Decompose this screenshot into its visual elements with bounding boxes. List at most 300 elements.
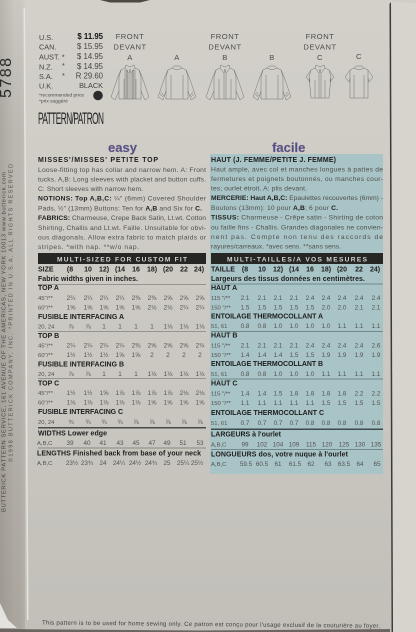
yardage table: metric: HAUT A bbox=[211, 285, 237, 292]
yardage table: imperial: 2 bbox=[182, 352, 186, 359]
yardage table: imperial: ⅞ bbox=[149, 419, 155, 426]
table banner bbox=[38, 253, 206, 264]
garment view: front B: DEVANT bbox=[208, 42, 242, 52]
yardage table: imperial: 25 bbox=[163, 460, 171, 467]
yardage table: imperial: 1½ bbox=[84, 389, 93, 397]
yardage table: metric: 2.4 bbox=[355, 295, 364, 302]
yardage table: imperial: ⅞ bbox=[181, 419, 187, 426]
yardage table: imperial: ¾ bbox=[68, 419, 74, 426]
garment view: front A: DEVANT bbox=[113, 42, 147, 52]
yardage table: metric: 1.9 bbox=[355, 352, 364, 359]
yardage table: metric: 2.4 bbox=[306, 342, 315, 350]
yardage table: metric: 115 "/** bbox=[211, 344, 231, 350]
yardage table: imperial: 2⅜ bbox=[132, 295, 141, 302]
french description: Boutons (13mm): 10 pour A,B; 6 pour C. bbox=[211, 205, 338, 212]
yardage table: metric: 1.0 bbox=[322, 323, 331, 330]
yardage table: metric: 65 bbox=[373, 461, 381, 468]
french panel bbox=[210, 140, 383, 474]
yardage table: metric: 1.5 bbox=[372, 400, 381, 407]
yardage table: metric: 16 bbox=[306, 266, 314, 274]
yardage table: imperial: 1⅝ bbox=[84, 305, 93, 312]
yardage table: imperial: 2 bbox=[198, 352, 202, 359]
yardage table: metric: 0.8 bbox=[258, 323, 267, 330]
yardage table: metric: 1.0 bbox=[274, 371, 283, 378]
french description: MERCERIE: Haut A,B,C: Epaulettes recouvertes (6mm) - bbox=[211, 195, 383, 202]
table banner: MULTI-TAILLES/A VOS MESURES bbox=[227, 256, 368, 264]
yardage table: imperial: Fabric widths given in inches. bbox=[38, 276, 138, 283]
yardage table: imperial: 1⅛ bbox=[67, 400, 76, 406]
yardage table: imperial: 1⅝ bbox=[132, 305, 141, 312]
yardage table: imperial: 45 bbox=[132, 440, 140, 447]
yardage table: metric: 1.1 bbox=[322, 371, 331, 378]
yardage table: imperial: 60"/** bbox=[38, 306, 54, 312]
english description: tucks. A,B: Long sleeves with placket and button cuffs. bbox=[38, 176, 206, 184]
yardage table: imperial: TOP C bbox=[38, 380, 59, 388]
english description: ous diagonals. Allow extra fabric to match plaids or bbox=[38, 234, 207, 242]
yardage table: metric: 150 "/** bbox=[211, 306, 231, 312]
garment view: front A bbox=[111, 32, 149, 100]
yardage table: imperial: 20, 24 bbox=[38, 420, 55, 426]
price list: R 29.60 bbox=[76, 72, 104, 80]
yardage table: imperial: 1⅝ bbox=[116, 305, 125, 312]
yardage table: metric: (8 bbox=[242, 266, 248, 274]
price list: AUST. * bbox=[39, 52, 65, 62]
price list: BLACK bbox=[79, 81, 103, 90]
yardage table: imperial: 2⅝ bbox=[164, 295, 173, 302]
yardage table: metric: 150 "/** bbox=[211, 353, 231, 359]
yardage table: metric: 2.4 bbox=[306, 295, 315, 302]
yardage table: metric: 2.1 bbox=[241, 295, 250, 302]
yardage table: imperial: ¾ bbox=[101, 419, 107, 426]
yardage table: metric: 1.9 bbox=[372, 352, 381, 359]
garment view: front B: FRONT bbox=[211, 32, 239, 41]
yardage table: metric: 1.4 bbox=[241, 390, 250, 398]
yardage table: metric: 1.1 bbox=[372, 323, 381, 330]
yardage table: metric: 2.1 bbox=[290, 342, 299, 350]
yardage table: imperial: 24¾ bbox=[145, 460, 158, 467]
yardage table: imperial: 1⅛ bbox=[180, 371, 189, 378]
yardage table: imperial: 1⅛ bbox=[100, 400, 109, 406]
yardage table: imperial: 1⅛ bbox=[116, 400, 125, 406]
yardage table: metric: 0.8 bbox=[241, 323, 250, 330]
yardage table: metric: 2.1 bbox=[258, 295, 267, 302]
yardage table: imperial: 2⅛ bbox=[180, 390, 189, 397]
yardage table: imperial: WIDTHS Lower edge bbox=[38, 430, 107, 438]
french description: TISSUS: Charmeuse - Crêpe satin - Shirting de coton bbox=[211, 214, 383, 222]
garment view: back C: C bbox=[356, 52, 362, 61]
english description: stripes. *with nap. **w/o nap. bbox=[38, 244, 139, 251]
yardage table: metric: 1.0 bbox=[290, 323, 299, 330]
yardage table: imperial: 1 bbox=[118, 371, 122, 378]
yardage table: imperial: 23¾ bbox=[81, 460, 94, 467]
yardage table: metric: 1.5 bbox=[241, 304, 250, 312]
yardage table: metric: 0.8 bbox=[241, 371, 250, 378]
yardage table: imperial: 1½ bbox=[84, 351, 93, 359]
yardage table: imperial: ¾ bbox=[85, 419, 91, 426]
yardage table: metric: 2.1 bbox=[274, 295, 283, 302]
yardage table: imperial: 25½ bbox=[191, 459, 204, 467]
yardage table: imperial: 1⅛ bbox=[148, 371, 157, 378]
yardage table: imperial: FUSIBLE INTERFACING C bbox=[38, 409, 123, 416]
yardage table: imperial: 1⅞ bbox=[148, 390, 157, 397]
yardage table: metric: 1.8 bbox=[290, 390, 299, 398]
yardage table: metric: 0.7 bbox=[290, 420, 299, 427]
yardage table: imperial: 1⅝ bbox=[67, 305, 76, 312]
yardage table: imperial: 39 bbox=[66, 440, 74, 447]
english description bbox=[38, 157, 207, 251]
yardage table: metric: 115 "/** bbox=[211, 392, 231, 398]
yardage table: imperial: 1⅛ bbox=[84, 400, 93, 406]
yardage table: metric: HAUT C bbox=[211, 380, 237, 388]
yardage table: metric: 24) bbox=[370, 266, 380, 274]
yardage table: metric: 0.8 bbox=[355, 420, 364, 427]
yardage table: imperial: 40 bbox=[83, 440, 91, 447]
yardage table: imperial: 60"/** bbox=[38, 353, 54, 359]
price list: S.A. bbox=[39, 72, 53, 81]
yardage table: imperial: ⅞ bbox=[197, 419, 203, 426]
yardage table: metric: 1.1 bbox=[338, 323, 347, 330]
yardage table: imperial: 22 bbox=[180, 266, 188, 274]
garment view: front C: C bbox=[317, 53, 323, 62]
yardage table: metric: 18) bbox=[321, 266, 331, 274]
english description: Pads, ½" (13mm) Buttons: Ten for A,B and Six for C. bbox=[38, 204, 202, 212]
french description: nent pas. Compte non tenu des raccords de bbox=[211, 234, 383, 241]
yardage table: imperial: ⅞ bbox=[68, 324, 74, 330]
french description: tes; ourlet étroit. A: plis devant. bbox=[211, 186, 307, 192]
yardage table: metric: 2.6 bbox=[372, 342, 381, 350]
yardage table: metric: 102 bbox=[257, 442, 268, 448]
yardage table: metric: 1.5 bbox=[355, 400, 364, 407]
yardage table: imperial: FUSIBLE INTERFACING B bbox=[38, 362, 124, 368]
yardage table: imperial: 16 bbox=[132, 266, 140, 274]
yardage table: imperial: 2⅝ bbox=[180, 295, 189, 302]
yardage table: imperial: 1 bbox=[134, 371, 138, 378]
yardage table: imperial: 1½ bbox=[67, 389, 76, 397]
yardage table: imperial: 1⅞ bbox=[116, 390, 125, 397]
price list: $ 15.95 bbox=[77, 42, 104, 51]
yardage table: metric: 2.4 bbox=[322, 342, 331, 350]
yardage table: metric: 150 "/** bbox=[211, 401, 231, 407]
yardage table: metric: 64 bbox=[356, 461, 364, 468]
yardage table: imperial: 2¼ bbox=[116, 295, 125, 302]
yardage table: metric: 1.5 bbox=[274, 304, 283, 312]
price list: CAN. bbox=[39, 42, 56, 52]
yardage table: imperial: 60"/** bbox=[38, 400, 54, 406]
yardage table: imperial: 43 bbox=[116, 440, 124, 447]
yardage table: imperial: 2⅝ bbox=[164, 342, 173, 350]
yardage table: imperial: A,B,C bbox=[37, 461, 53, 467]
yardage table: metric: A,B,C bbox=[211, 442, 227, 448]
yardage table: metric: 0.8 bbox=[306, 420, 315, 427]
yardage table: imperial: 23½ bbox=[66, 459, 79, 467]
yardage table: imperial: 2¼ bbox=[84, 342, 93, 350]
yardage table: metric: LONGUEURS dos, votre nuque à l'ourlet bbox=[211, 452, 349, 458]
yardage table: imperial: 24) bbox=[194, 266, 204, 274]
yardage table: metric: 0.7 bbox=[258, 420, 267, 427]
yardage table: imperial: TOP A bbox=[38, 285, 59, 292]
garment view: front B bbox=[206, 32, 244, 100]
yardage table: metric: 1.5 bbox=[258, 304, 267, 312]
yardage table: imperial: 1⅝ bbox=[164, 400, 173, 406]
garment view: back B: B bbox=[269, 53, 275, 62]
price list bbox=[39, 32, 104, 104]
yardage table: imperial: 24½ bbox=[129, 459, 142, 467]
yardage table: metric: 1.4 bbox=[258, 390, 267, 398]
garment view: back B bbox=[253, 53, 291, 100]
yardage table: imperial: 2¼ bbox=[100, 295, 109, 302]
price list: $ 14.95 bbox=[77, 52, 104, 61]
garment view: front B: B bbox=[222, 53, 228, 62]
yardage table: metric bbox=[211, 266, 383, 468]
yardage table: metric: 109 bbox=[289, 442, 300, 448]
yardage table: metric: 61 bbox=[274, 461, 282, 468]
yardage table: metric: 12) bbox=[273, 266, 283, 274]
yardage table: imperial: 1⅝ bbox=[132, 352, 141, 359]
price list: * bbox=[62, 61, 65, 70]
yardage table: metric: 125 bbox=[339, 442, 350, 448]
yardage table: imperial: 2⅛ bbox=[196, 390, 205, 397]
yardage table: imperial: 2 bbox=[166, 352, 170, 359]
sidebar: publisher address: BUTTERICK PATTERN SERVICE, 161 AVENUE OF THE AMERICAS, NEW YORK 10013 www.butterick.com bbox=[2, 172, 8, 512]
yardage table: imperial: 2¼ bbox=[196, 305, 205, 312]
yardage table: imperial: 45"/** bbox=[38, 344, 54, 350]
table banner: MULTI-SIZED FOR CUSTOM FIT bbox=[57, 256, 187, 264]
yardage table: metric: 1.5 bbox=[306, 352, 315, 359]
yardage table: imperial: 1⅛ bbox=[164, 324, 173, 330]
yardage table: metric: 1.4 bbox=[274, 352, 283, 359]
yardage table: imperial: 53 bbox=[196, 440, 204, 447]
yardage table: metric: 135 bbox=[371, 442, 382, 448]
french description: ou faille fins - Challis. Grandes diagonales ne convien- bbox=[211, 224, 383, 232]
yardage table: imperial: 2⅝ bbox=[196, 295, 205, 302]
yardage table: metric: ENTOILAGE THERMOCOLLANT C bbox=[211, 410, 324, 417]
yardage table: imperial: 1 bbox=[118, 324, 122, 330]
yardage table: metric: 1.1 bbox=[258, 400, 267, 407]
yardage table: imperial: 1½ bbox=[100, 351, 109, 359]
yardage table: imperial: 41 bbox=[99, 440, 107, 447]
yardage table: metric: 60.5 bbox=[256, 461, 269, 468]
panel background bbox=[210, 154, 383, 474]
garment view: front A: A bbox=[127, 53, 133, 62]
price list: $ 11.95 bbox=[77, 32, 104, 41]
yardage table: metric: 2.1 bbox=[355, 304, 364, 312]
yardage table: imperial: 24¼ bbox=[113, 460, 126, 467]
yardage table: imperial: 1⅛ bbox=[164, 371, 173, 378]
yardage table: imperial: 1⅝ bbox=[196, 400, 205, 406]
yardage table: imperial: 2⅜ bbox=[148, 295, 157, 302]
yardage table: metric: 1.0 bbox=[290, 371, 299, 378]
yardage table: imperial: 25¼ bbox=[177, 460, 190, 467]
english description: Loose-fitting top has collar and narrow hem. A: Front bbox=[38, 167, 206, 174]
yardage table: metric: 1.0 bbox=[306, 323, 315, 330]
difficulty label: easy: easy bbox=[108, 140, 138, 155]
yardage table: metric: 2.0 bbox=[338, 304, 347, 312]
yardage table: metric: 0.8 bbox=[322, 420, 331, 427]
yardage table: imperial: 10 bbox=[84, 266, 92, 274]
price list: * bbox=[62, 71, 65, 80]
yardage table: imperial: 2¼ bbox=[180, 305, 189, 312]
yardage table: imperial: 2¾ bbox=[196, 342, 205, 350]
yardage table: imperial: ⅞ bbox=[85, 324, 91, 330]
garment view: front C: DEVANT bbox=[303, 42, 337, 52]
english description: C: Short sleeves with narrow hem. bbox=[38, 186, 143, 193]
yardage table: metric: 61.5 bbox=[289, 461, 302, 468]
french description: Haut ample, avec col et manches longues à pattes de bbox=[211, 166, 383, 174]
yardage table: imperial: 2⅛ bbox=[164, 305, 173, 312]
yardage table: metric: ENTOILAGE THERMOCOLLANT A bbox=[211, 314, 323, 320]
yardage table: metric: 2.4 bbox=[338, 295, 347, 302]
yardage table: metric: 1.1 bbox=[338, 371, 347, 378]
yardage table: metric: 1.5 bbox=[274, 390, 283, 398]
english description: Shirting, Challis and Lt.wt. Faille. Unsuitable for obvi- bbox=[38, 225, 206, 232]
yardage table: metric: 2.1 bbox=[241, 342, 250, 350]
yardage table: imperial: 1⅛ bbox=[196, 371, 205, 378]
yardage table: imperial: 47 bbox=[148, 440, 156, 447]
pattern heading: PATTERN/PATRON bbox=[38, 109, 104, 128]
price list: *prix suggéré bbox=[39, 98, 68, 104]
yardage table: imperial: 2¼ bbox=[116, 342, 125, 350]
yardage table: metric: 1.1 bbox=[274, 400, 283, 407]
yardage table: metric: 1.1 bbox=[241, 400, 250, 407]
yardage table: metric: 1.0 bbox=[274, 323, 283, 330]
yardage table: imperial: 2⅝ bbox=[180, 342, 189, 350]
yardage table: imperial: TOP B bbox=[38, 333, 59, 340]
yardage table: imperial: 18) bbox=[147, 266, 157, 274]
yardage table: metric: 1.5 bbox=[338, 400, 347, 407]
yardage table: metric: Largeurs des tissus données en centimètres. bbox=[211, 276, 365, 283]
yardage table: metric: 130 bbox=[355, 442, 366, 448]
sidebar: copyright: ©1998 BUTTERICK COMPANY, INC. *PRINTED IN U.S.A. ALL RIGHTS RESERVED bbox=[8, 164, 14, 462]
yardage table: metric: 1.9 bbox=[322, 352, 331, 359]
yardage table: metric: 1.8 bbox=[322, 390, 331, 398]
yardage table: imperial: 2⅜ bbox=[132, 342, 141, 350]
french description bbox=[211, 157, 383, 250]
yardage table: metric: 0.7 bbox=[241, 420, 250, 427]
yardage table: metric: 2.1 bbox=[372, 304, 381, 312]
price list: N.Z. bbox=[39, 62, 53, 72]
yardage table: metric: 59.5 bbox=[240, 461, 253, 468]
yardage table: imperial: (14 bbox=[115, 266, 125, 274]
table banner bbox=[211, 253, 383, 264]
garment view: front C: FRONT bbox=[306, 32, 334, 41]
yardage table: metric: 1.9 bbox=[338, 352, 347, 359]
yardage table: metric: 2.1 bbox=[290, 295, 299, 302]
yardage table: imperial: ⅞ bbox=[68, 371, 74, 378]
yardage table: metric: 99 bbox=[241, 442, 249, 448]
garment view: front A: FRONT bbox=[116, 32, 144, 41]
yardage table: metric: 1.8 bbox=[306, 390, 315, 398]
yardage table: imperial: SIZE bbox=[38, 266, 54, 274]
yardage table: imperial: 49 bbox=[163, 440, 171, 447]
yardage table: metric: 51, 61 bbox=[211, 372, 227, 378]
yardage table: imperial: 1 bbox=[150, 324, 154, 330]
yardage table: metric: 1.5 bbox=[322, 400, 331, 407]
yardage table: metric: 63.5 bbox=[338, 461, 351, 468]
yardage table: metric: ENTOILAGE THERMOCOLLANT B bbox=[211, 361, 323, 368]
english panel bbox=[37, 140, 207, 467]
yardage table: metric: 2.4 bbox=[338, 342, 347, 350]
yardage table: metric: (14 bbox=[289, 266, 299, 274]
yardage table: metric: 1.1 bbox=[355, 371, 364, 378]
yardage table: metric: 2.0 bbox=[322, 304, 331, 312]
yardage table: imperial: ¾ bbox=[117, 419, 123, 426]
yardage table: metric: 1.4 bbox=[241, 352, 250, 359]
yardage table: imperial: 1⅞ bbox=[132, 390, 141, 397]
yardage table: imperial: 20, 24 bbox=[38, 372, 55, 378]
yardage table: imperial: 1⅝ bbox=[100, 390, 109, 397]
yardage table: imperial: 1 bbox=[102, 324, 106, 330]
yardage table: imperial: LENGTHS Finished back from base of your neck bbox=[37, 450, 201, 458]
yardage table: imperial: 45"/** bbox=[38, 296, 54, 302]
yardage table: metric: LARGEURS à l'ourlet bbox=[211, 432, 282, 438]
yardage table: imperial: 51 bbox=[179, 440, 187, 447]
yardage table: metric: 120 bbox=[322, 442, 333, 448]
yardage table: imperial: ⅞ bbox=[133, 419, 139, 426]
yardage table: metric: 1.1 bbox=[306, 400, 315, 407]
footer notice: This pattern is to be used for home sewing only. Ce patron est conçu pour l'usage exclusif de la couturière au foyer. bbox=[42, 621, 380, 630]
yardage table: metric: 115 bbox=[306, 442, 317, 448]
yardage table: metric: 2.2 bbox=[372, 390, 381, 398]
yardage table: imperial: 1⅝ bbox=[100, 305, 109, 312]
yardage table: imperial: 1½ bbox=[67, 351, 76, 359]
price list: $ 14.95 bbox=[77, 62, 104, 71]
yardage table: imperial: 2⅝ bbox=[148, 342, 157, 350]
yardage table: metric: 104 bbox=[273, 442, 284, 448]
yardage table: metric: 1.1 bbox=[372, 371, 381, 378]
yardage table: imperial: 1⅛ bbox=[180, 324, 189, 330]
yardage table: metric: 51, 61 bbox=[211, 421, 227, 427]
yardage table: imperial: 1⅞ bbox=[164, 390, 173, 397]
yardage table: imperial: 2⅛ bbox=[148, 305, 157, 312]
yardage table: imperial: 1⅛ bbox=[196, 324, 205, 330]
yardage table: metric: 0.8 bbox=[338, 420, 347, 427]
yardage table: metric: 1.8 bbox=[338, 390, 347, 398]
yardage table: imperial: 1⅝ bbox=[180, 400, 189, 406]
yardage table: metric: 62 bbox=[307, 461, 315, 468]
yardage table: metric: 2.1 bbox=[274, 342, 283, 350]
yardage table: metric: A,B,C bbox=[211, 462, 227, 468]
yardage table: metric: 22 bbox=[355, 266, 363, 274]
difficulty label: facile: facile bbox=[272, 140, 305, 155]
yardage table: imperial: 20, 24 bbox=[38, 324, 55, 330]
yardage table: metric: 1.5 bbox=[290, 352, 299, 359]
yardage table: metric: 2.4 bbox=[322, 295, 331, 302]
yardage table: metric: 1.1 bbox=[290, 400, 299, 407]
garment view: front C bbox=[303, 32, 337, 98]
yardage table: imperial: 12) bbox=[99, 266, 109, 274]
yardage table: imperial: 1⅝ bbox=[116, 352, 125, 359]
french description: HAUT (J. FEMME/PETITE J. FEMME) bbox=[211, 157, 336, 164]
yardage table: imperial: (20 bbox=[163, 266, 173, 274]
yardage table: metric: TAILLE bbox=[211, 266, 235, 274]
yardage table: imperial: A,B,C bbox=[37, 441, 53, 447]
yardage table: imperial: 2¼ bbox=[67, 295, 76, 302]
french description: rayures/carreaux. *avec sens. **sans sens. bbox=[211, 244, 341, 250]
english description: NOTIONS: Top A,B,C: ¼" (6mm) Covered Shoulder bbox=[38, 196, 207, 202]
garment view: back A: A bbox=[174, 53, 180, 62]
yardage table: imperial: 45"/** bbox=[38, 391, 54, 397]
english description: FABRICS: Charmeuse, Crepe Back Satin, Lt.wt. Cotton bbox=[38, 215, 206, 222]
yardage table: metric: 115 "/** bbox=[211, 296, 231, 302]
price list: *recommended price bbox=[39, 92, 84, 98]
yardage table: metric: 0.8 bbox=[258, 371, 267, 378]
price list: U.K. bbox=[39, 82, 53, 90]
yardage table: metric: 10 bbox=[258, 266, 266, 274]
yardage table: metric: 1.5 bbox=[290, 304, 299, 312]
yardage table: metric: 1.4 bbox=[258, 352, 267, 359]
garment view: back C bbox=[345, 52, 373, 98]
garment view: back A bbox=[158, 53, 196, 100]
